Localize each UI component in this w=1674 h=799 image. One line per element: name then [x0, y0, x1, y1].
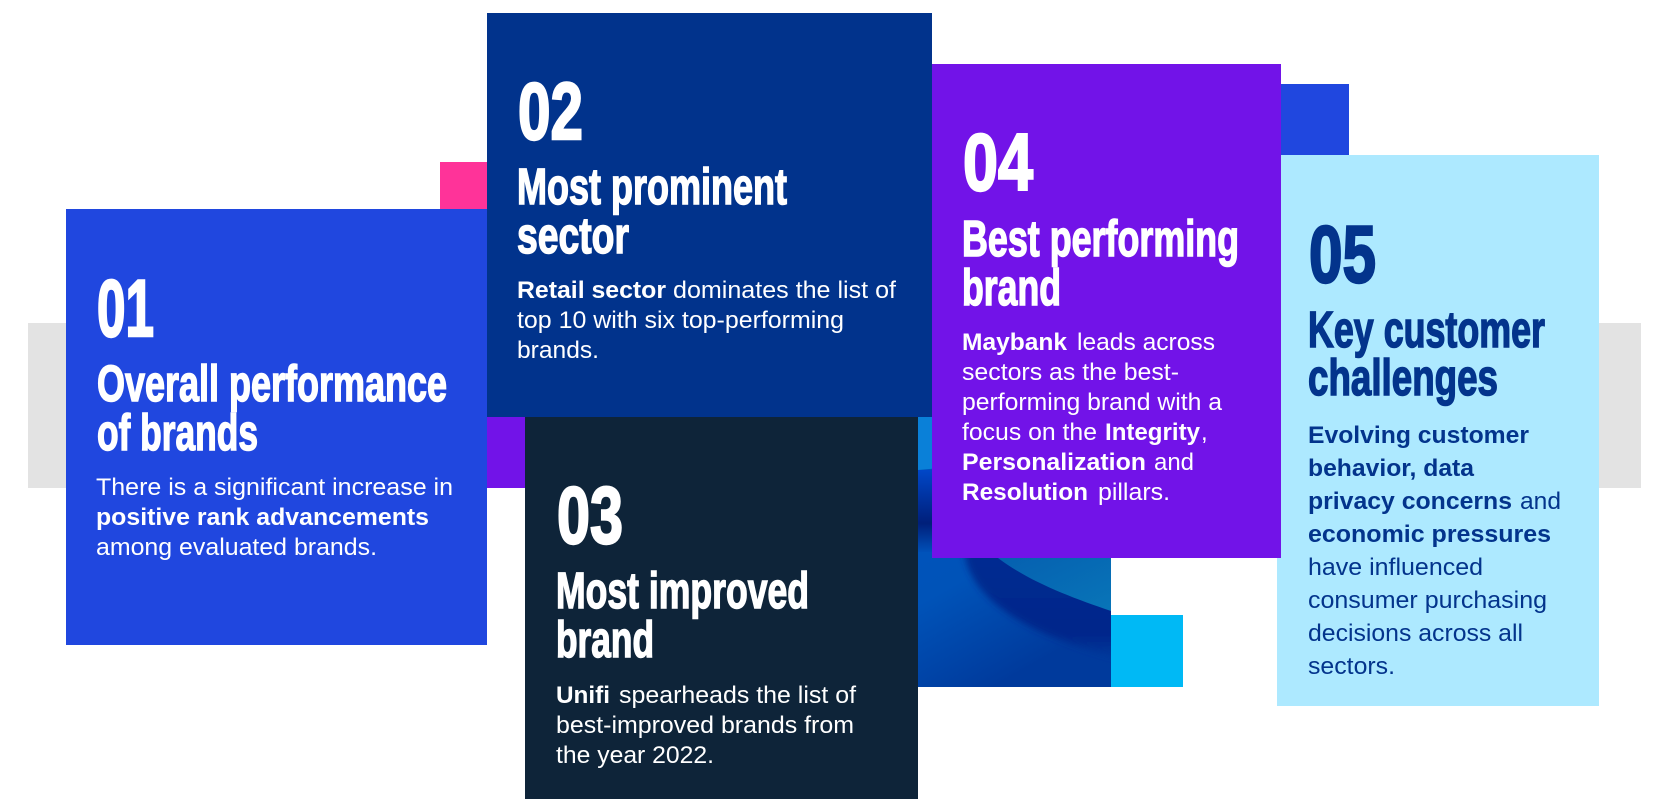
heading 05 — [1308, 301, 1545, 406]
gradient image panel — [918, 417, 1125, 687]
purple accent square — [487, 417, 525, 488]
body text 04: Maybank — [962, 329, 1068, 356]
body text 01: There is a significant increase in — [96, 474, 453, 501]
panel 01: overall performance — [66, 209, 487, 645]
body text 05: behavior, data — [1308, 455, 1475, 482]
body text 04: focus on the — [962, 419, 1097, 446]
body text 05: consumer purchasing — [1308, 587, 1547, 614]
body text 04 — [962, 329, 1223, 506]
body text 05: economic pressures — [1308, 521, 1551, 548]
heading 05: Key customer — [1308, 301, 1545, 358]
body text 05: decisions across all — [1308, 620, 1523, 647]
heading 02 — [517, 158, 787, 264]
heading 04: Best performing — [962, 210, 1239, 267]
body text 05: and — [1520, 488, 1561, 515]
number 02: 02 — [518, 67, 583, 157]
blue accent square — [1277, 84, 1349, 155]
heading 05: challenges — [1308, 349, 1498, 406]
heading 01: Overall performance — [97, 355, 447, 412]
body text 05 — [1308, 422, 1561, 680]
body text 04: performing brand with a — [962, 389, 1223, 416]
body text 02: top 10 with six top-performing — [517, 307, 844, 334]
body text 01 — [96, 474, 453, 561]
body text 04: and — [1154, 449, 1194, 476]
number 03: 03 — [557, 471, 623, 561]
body text 03: spearheads the list of — [619, 682, 856, 709]
body text 03 — [556, 682, 856, 769]
heading 03: brand — [556, 611, 654, 668]
cyan accent square — [1111, 615, 1183, 687]
body text 04: sectors as the best- — [962, 359, 1179, 386]
body text 01: positive rank advancements — [96, 504, 429, 531]
heading 02: Most prominent — [517, 158, 787, 215]
body text 02: dominates the list of — [673, 277, 896, 304]
panel 04: best performing brand — [932, 64, 1281, 558]
heading 02: sector — [517, 207, 629, 264]
body text 05: have influenced — [1308, 554, 1483, 581]
grey background band — [28, 323, 1641, 488]
body text 04: pillars. — [1098, 479, 1170, 506]
body text 03: best-improved brands from — [556, 712, 854, 739]
heading 03: Most improved — [556, 562, 809, 619]
number 05: 05 — [1309, 210, 1376, 300]
panel 02: most prominent sector — [487, 13, 932, 417]
number 04: 04 — [963, 118, 1033, 208]
heading 03 — [556, 562, 809, 668]
heading 04: brand — [962, 259, 1061, 316]
body text 02 — [517, 277, 896, 364]
heading 04 — [962, 210, 1239, 316]
panel 03: most improved brand — [525, 417, 918, 799]
body text 04: Personalization — [962, 449, 1146, 476]
body text 05: privacy concerns — [1308, 488, 1512, 515]
pink accent square — [440, 162, 487, 209]
heading 01 — [97, 355, 447, 461]
body text 01: among evaluated brands. — [96, 534, 377, 561]
body text 03: Unifi — [556, 682, 610, 709]
body text 04: , — [1201, 419, 1208, 446]
body text 02: brands. — [517, 337, 599, 364]
body text 04: Integrity — [1105, 419, 1201, 446]
body text 04: leads across — [1077, 329, 1215, 356]
panel 05: key customer challenges — [1277, 155, 1599, 706]
body text 04: Resolution — [962, 479, 1088, 506]
number 01: 01 — [97, 264, 154, 354]
body text 02: Retail sector — [517, 277, 666, 304]
body text 03: the year 2022. — [556, 742, 714, 769]
body text 05: Evolving customer — [1308, 422, 1529, 449]
body text 05: sectors. — [1308, 653, 1395, 680]
heading 01: of brands — [97, 404, 258, 461]
